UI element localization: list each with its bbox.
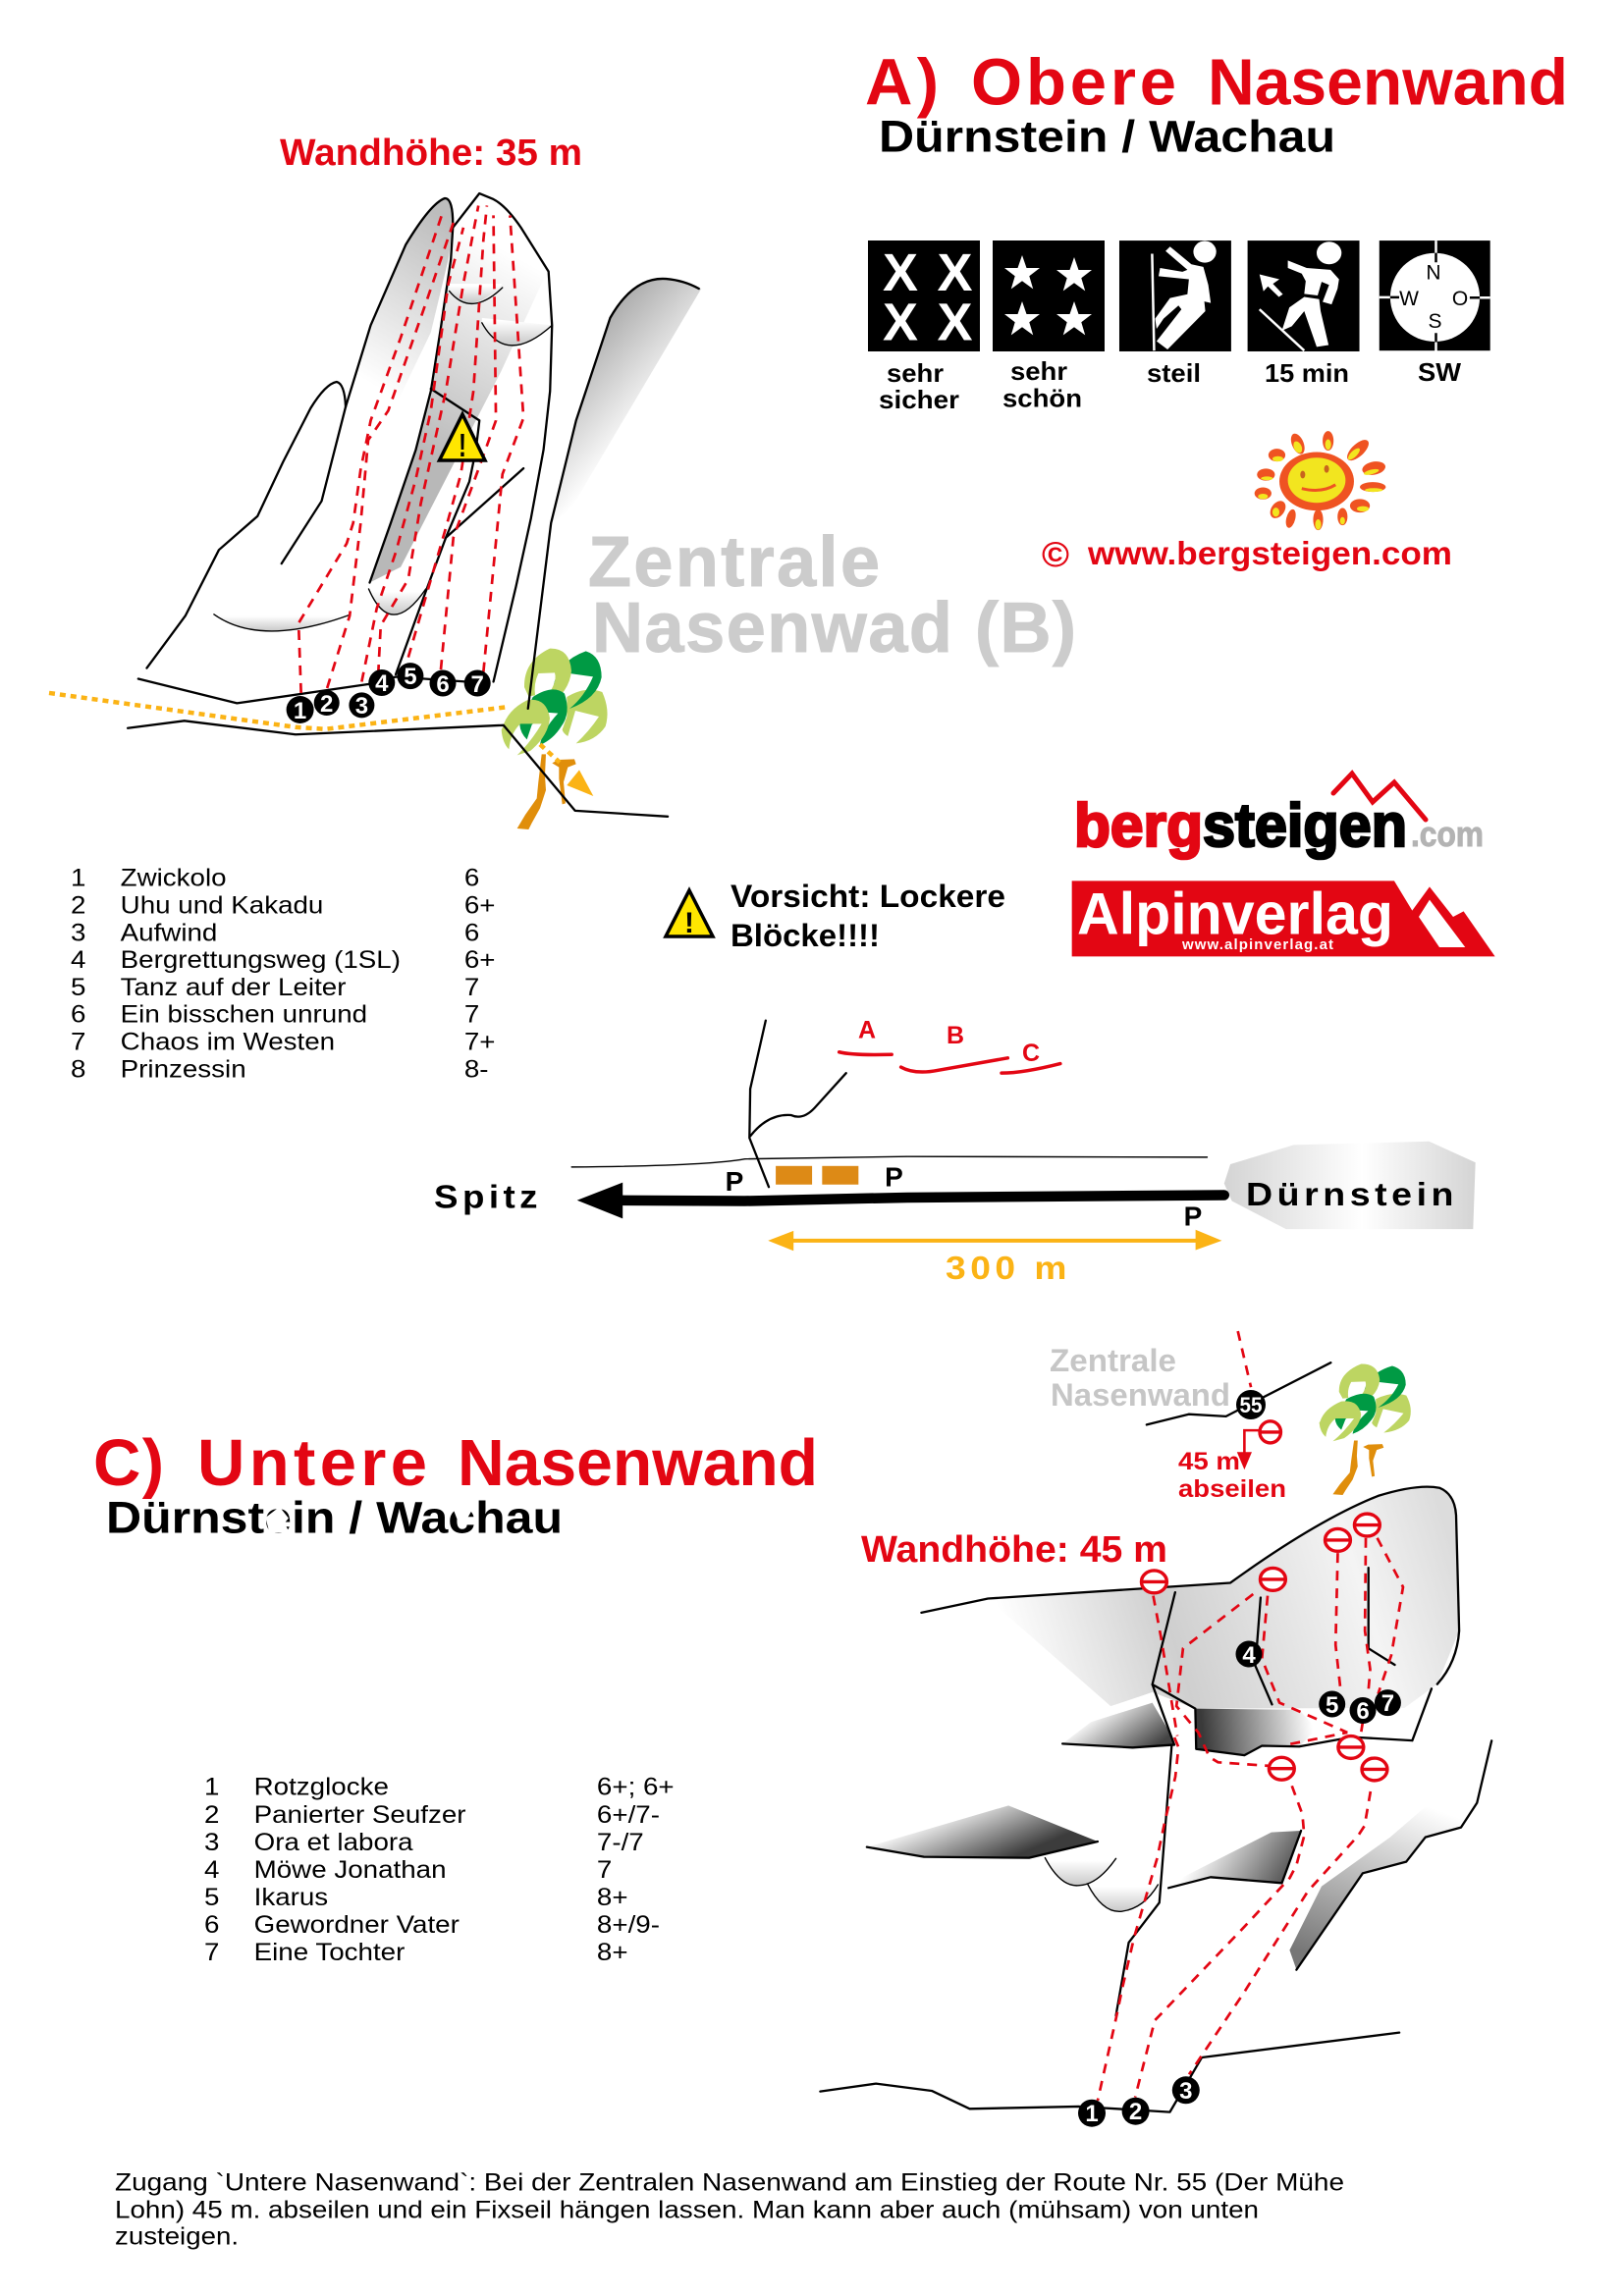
rappel label: 45 m xyxy=(1178,1448,1240,1475)
route list C: 8+ xyxy=(597,1938,628,1966)
anchor rings xyxy=(1141,1514,1387,1781)
rock shading lower xyxy=(867,1740,1491,1970)
route list C: Ora et labora xyxy=(254,1828,413,1856)
rock outlines xyxy=(128,193,699,817)
route number badges A xyxy=(287,663,491,724)
label: Zentrale Nasenwand: Nasenwand xyxy=(1051,1377,1230,1413)
route number badges A: 6 xyxy=(436,671,450,698)
topo: Untere Nasenwand lower xyxy=(820,1737,1491,2112)
rock outlines lower xyxy=(820,1740,1491,2112)
route list A: 7 xyxy=(464,1000,479,1028)
route list C: Ikarus xyxy=(254,1883,328,1911)
icon: compass xyxy=(1380,240,1490,353)
logo: bergsteigen.com: berg xyxy=(1074,792,1203,860)
route number badges A: 7 xyxy=(471,671,484,698)
route list C: 7-/7 xyxy=(597,1828,644,1856)
route number badges A: 2 xyxy=(320,691,333,718)
subtitle: Dürnstein / Wachau: Dürnstein / Wachau xyxy=(106,1493,563,1543)
town shading xyxy=(1224,1142,1476,1229)
route list A: Uhu und Kakadu xyxy=(121,891,323,919)
route list C: 2 xyxy=(204,1800,219,1828)
label: Zentrale Nasenwad (B) xyxy=(588,523,1076,667)
title: C) Untere Nasenwand: Nasenwand xyxy=(458,1426,818,1500)
icon: sehr sicher xyxy=(868,240,980,351)
map labels: 300 m xyxy=(946,1250,1071,1286)
location map xyxy=(434,1017,1476,1286)
route number badges C: 3 xyxy=(1179,2078,1192,2105)
route list C: Möwe Jonathan xyxy=(254,1855,447,1884)
subtitle: Dürnstein / Wachau: Dürnstein / Wachau xyxy=(879,112,1335,161)
route list C: 1 xyxy=(204,1773,219,1800)
icon: warning on wall: ! xyxy=(459,427,466,463)
route list A: 8- xyxy=(464,1055,489,1083)
map labels: A xyxy=(858,1017,876,1044)
logo: bergsteigen.com: steigen xyxy=(1203,792,1407,860)
route list A: Aufwind xyxy=(121,919,217,946)
icon captions: 15 min xyxy=(1265,358,1349,388)
map labels: P xyxy=(1184,1201,1202,1232)
access description: Zugang `Untere Nasenwand`: Bei der Zentralen Nasenwand am Einstieg der Route Nr. 55 (Der Mühe xyxy=(115,2169,1344,2197)
rock outlines upper xyxy=(921,1362,1459,1755)
label: Zentrale Nasenwand: Zentrale xyxy=(1050,1343,1176,1378)
distance arrow xyxy=(768,1230,1221,1251)
logo: bergsteigen.com xyxy=(1074,774,1484,860)
compass letters: S xyxy=(1428,310,1442,333)
warning notice xyxy=(666,879,1005,953)
topo: Obere Nasenwand xyxy=(49,193,701,829)
route list C: Eine Tochter xyxy=(254,1938,406,1966)
route list C: 6 xyxy=(204,1910,219,1939)
route list C: 4 xyxy=(204,1855,219,1884)
icon: sehr sicher: X xyxy=(937,243,973,302)
route list C: 7 xyxy=(204,1938,219,1966)
icon row xyxy=(868,240,1490,414)
map labels: P xyxy=(885,1162,903,1193)
route list C xyxy=(204,1773,675,1966)
access description xyxy=(115,2169,1344,2251)
compass letters: O xyxy=(1452,288,1468,310)
route number badges C: 6 xyxy=(1356,1698,1370,1725)
icon captions: SW xyxy=(1418,357,1461,387)
route number badges C: 2 xyxy=(1129,2099,1142,2125)
title: C) Untere Nasenwand xyxy=(93,1426,818,1500)
route list A: 1 xyxy=(71,864,85,891)
icon captions: sicher xyxy=(879,385,959,414)
rappel label xyxy=(1178,1448,1286,1503)
icon captions: sehr xyxy=(1010,356,1067,386)
warning text: Blöcke!!!! xyxy=(731,918,880,953)
icon captions xyxy=(879,356,1461,414)
icon: warning triangle xyxy=(666,890,713,939)
route list A: Tanz auf der Leiter xyxy=(121,973,347,1001)
tree C xyxy=(1320,1364,1411,1495)
route list A: 6+ xyxy=(464,891,495,919)
icon: sehr sicher: X xyxy=(937,293,973,351)
warning text xyxy=(731,879,1005,953)
approach arrow xyxy=(540,744,593,796)
route number badges C: 1 xyxy=(1085,2101,1099,2127)
route list A: 8 xyxy=(71,1055,85,1083)
route number badges A: 3 xyxy=(355,693,368,720)
map labels: C xyxy=(1022,1040,1040,1067)
route list A: Zwickolo xyxy=(121,864,227,891)
tree xyxy=(502,649,608,829)
icons drawn in shared coordinates xyxy=(1119,240,1490,353)
topo: Untere Nasenwand upper xyxy=(921,1331,1459,1781)
icon: warning triangle: ! xyxy=(684,907,694,939)
icon: sun xyxy=(1255,431,1388,530)
route list C: 8+/9- xyxy=(597,1910,660,1939)
icon captions: sehr xyxy=(887,358,944,388)
icon captions: schön xyxy=(1002,383,1082,412)
climbing routes xyxy=(298,205,523,693)
icon: sehr sicher: X xyxy=(883,293,918,351)
route list A: 7 xyxy=(464,973,479,1001)
route list A: 6+ xyxy=(464,945,495,974)
route list A: 6 xyxy=(464,919,479,946)
route list C: 6+/7- xyxy=(597,1800,660,1828)
copyright web address: © xyxy=(1042,534,1069,574)
route 55 badge xyxy=(1236,1390,1266,1419)
wall height C: Wandhöhe: 45 m xyxy=(861,1529,1167,1571)
route list A: Ein bisschen unrund xyxy=(121,1000,367,1028)
icon captions: steil xyxy=(1147,358,1201,388)
sector marks xyxy=(839,1052,1060,1073)
wall height A: Wandhöhe: 35 m xyxy=(280,133,582,174)
route number badges C: 4 xyxy=(1242,1642,1256,1669)
icon: sehr sicher: X xyxy=(883,243,918,302)
rock shading upper xyxy=(988,1351,1459,1755)
compass letters: N xyxy=(1426,261,1441,285)
road arrow xyxy=(577,1183,1224,1218)
icon: steil xyxy=(1119,240,1231,351)
rappel label: abseilen xyxy=(1178,1475,1286,1503)
route number badges A: 5 xyxy=(404,664,417,690)
title: A) Obere Nasenwand: A) xyxy=(865,45,939,120)
routes upper xyxy=(1154,1331,1403,1766)
logo: Alpinverlag: www.alpinverlag.at xyxy=(1181,936,1333,953)
access description: Lohn) 45 m. abseilen und ein Fixseil hängen lassen. Man kann aber auch (mühsam) von unten xyxy=(115,2196,1259,2223)
icon: warning on wall xyxy=(440,414,485,463)
route list A: Chaos im Westen xyxy=(121,1028,335,1055)
route list A: 5 xyxy=(71,973,85,1001)
route number badges C xyxy=(1078,1641,1401,2127)
route list A xyxy=(71,864,495,1083)
route list A: Prinzessin xyxy=(121,1055,246,1083)
route number badges A: 1 xyxy=(294,698,306,724)
icon: sehr schoen xyxy=(993,240,1105,351)
logo: bergsteigen.com: .com xyxy=(1411,814,1484,854)
route list A: 4 xyxy=(71,945,85,974)
route list A: 6 xyxy=(464,864,479,891)
route number badges C: 7 xyxy=(1381,1690,1394,1717)
route list C: 3 xyxy=(204,1828,219,1856)
parking rectangles xyxy=(776,1166,858,1185)
compass letters: W xyxy=(1399,288,1419,310)
route list C: 8+ xyxy=(597,1883,628,1911)
access description: zusteigen. xyxy=(115,2223,239,2251)
title: A) Obere Nasenwand xyxy=(865,45,1568,120)
route list A: 3 xyxy=(71,919,85,946)
route list A: 7+ xyxy=(464,1028,495,1055)
title: A) Obere Nasenwand: Nasenwand xyxy=(1208,45,1568,120)
rock shading xyxy=(49,193,701,729)
title: C) Untere Nasenwand: C) xyxy=(93,1426,164,1500)
map labels xyxy=(434,1017,1458,1286)
logo: Alpinverlag: Alpinverlag xyxy=(1077,881,1393,946)
route list A: 2 xyxy=(71,891,85,919)
map labels: P xyxy=(726,1166,743,1197)
route list C: Panierter Seufzer xyxy=(254,1800,466,1828)
route list A: Bergrettungsweg (1SL) xyxy=(121,945,401,974)
label: Zentrale Nasenwad (B): Zentrale xyxy=(588,523,880,602)
copyright web address: www.bergsteigen.com xyxy=(1087,535,1452,571)
route number badges C: 5 xyxy=(1326,1692,1338,1719)
route list A: 7 xyxy=(71,1028,85,1055)
route list C: Rotzglocke xyxy=(254,1773,389,1800)
route list C: 5 xyxy=(204,1883,219,1911)
route 55 badge: 55 xyxy=(1239,1393,1263,1417)
route list A: 6 xyxy=(71,1000,85,1028)
map labels: B xyxy=(947,1022,964,1049)
route list C: 6+; 6+ xyxy=(597,1773,675,1800)
label: Zentrale Nasenwand xyxy=(1050,1343,1230,1413)
map labels: Dürnstein xyxy=(1246,1176,1458,1212)
title: A) Obere Nasenwand: Obere xyxy=(971,45,1176,120)
logo: Alpinverlag xyxy=(1072,881,1495,956)
routes lower xyxy=(1098,1737,1371,2101)
compass letters xyxy=(1399,261,1468,333)
route list C: Gewordner Vater xyxy=(254,1910,460,1939)
warning text: Vorsicht: Lockere xyxy=(731,879,1005,914)
label: Zentrale Nasenwad (B): Nasenwad (B) xyxy=(592,589,1076,667)
map crag lines xyxy=(571,1021,1207,1187)
route number badges A: 4 xyxy=(375,670,389,697)
title: C) Untere Nasenwand: Untere xyxy=(197,1426,427,1500)
route list C: 7 xyxy=(597,1855,612,1884)
map labels: Spitz xyxy=(434,1179,542,1215)
icon: 15 min xyxy=(1248,240,1360,351)
rappel marker xyxy=(1237,1421,1280,1469)
